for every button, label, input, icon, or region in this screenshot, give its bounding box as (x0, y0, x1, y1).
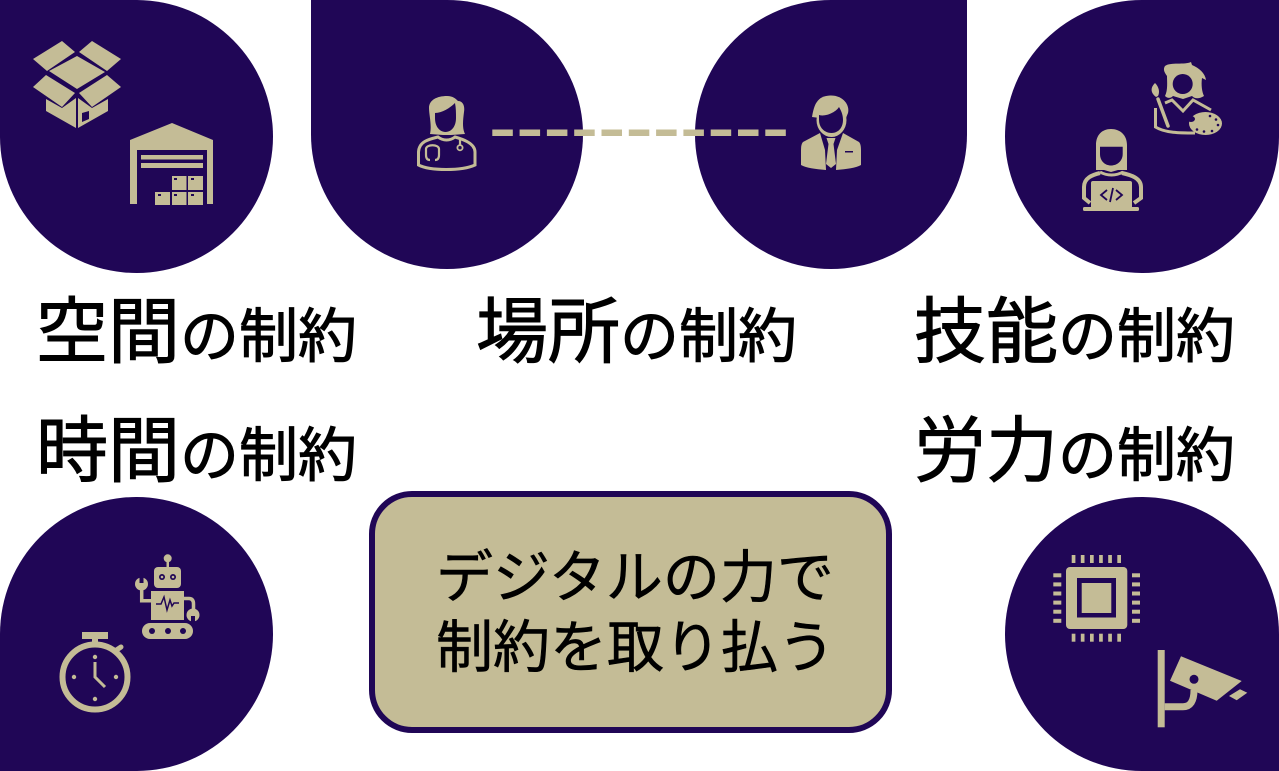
heading: skill constraint: 技能の制約 (914, 293, 1235, 373)
panel: location constraint right drop (695, 0, 967, 269)
callout: digital power removes constraints (372, 494, 889, 730)
dashed connector (492, 130, 786, 136)
panel: time constraint drop (0, 497, 273, 771)
icon: microchip (1053, 555, 1140, 642)
heading: time constraint: 時間の制約 (36, 412, 357, 492)
icon: doctor (418, 96, 475, 170)
icon: businessman (801, 95, 861, 170)
icon: programmer (1083, 129, 1141, 211)
icon: open box (33, 41, 121, 128)
icon: security camera (1158, 650, 1247, 727)
callout text line 2: 制約を取り払う (436, 616, 835, 680)
icon: stopwatch (62, 632, 128, 710)
heading: labor constraint: 労力の制約 (914, 412, 1235, 492)
icon: painter (1152, 62, 1222, 135)
heading: location constraint: 場所の制約 (476, 293, 797, 373)
panel: labor constraint drop (1005, 497, 1279, 771)
callout text line 1: デジタルの力で (436, 546, 834, 610)
panel: space constraint drop (0, 0, 273, 273)
icon: warehouse (130, 123, 213, 205)
panel: skill constraint drop (1005, 0, 1279, 273)
panel: location constraint left drop (311, 0, 583, 269)
icon: robot (135, 554, 200, 639)
heading: space constraint: 空間の制約 (36, 293, 357, 373)
